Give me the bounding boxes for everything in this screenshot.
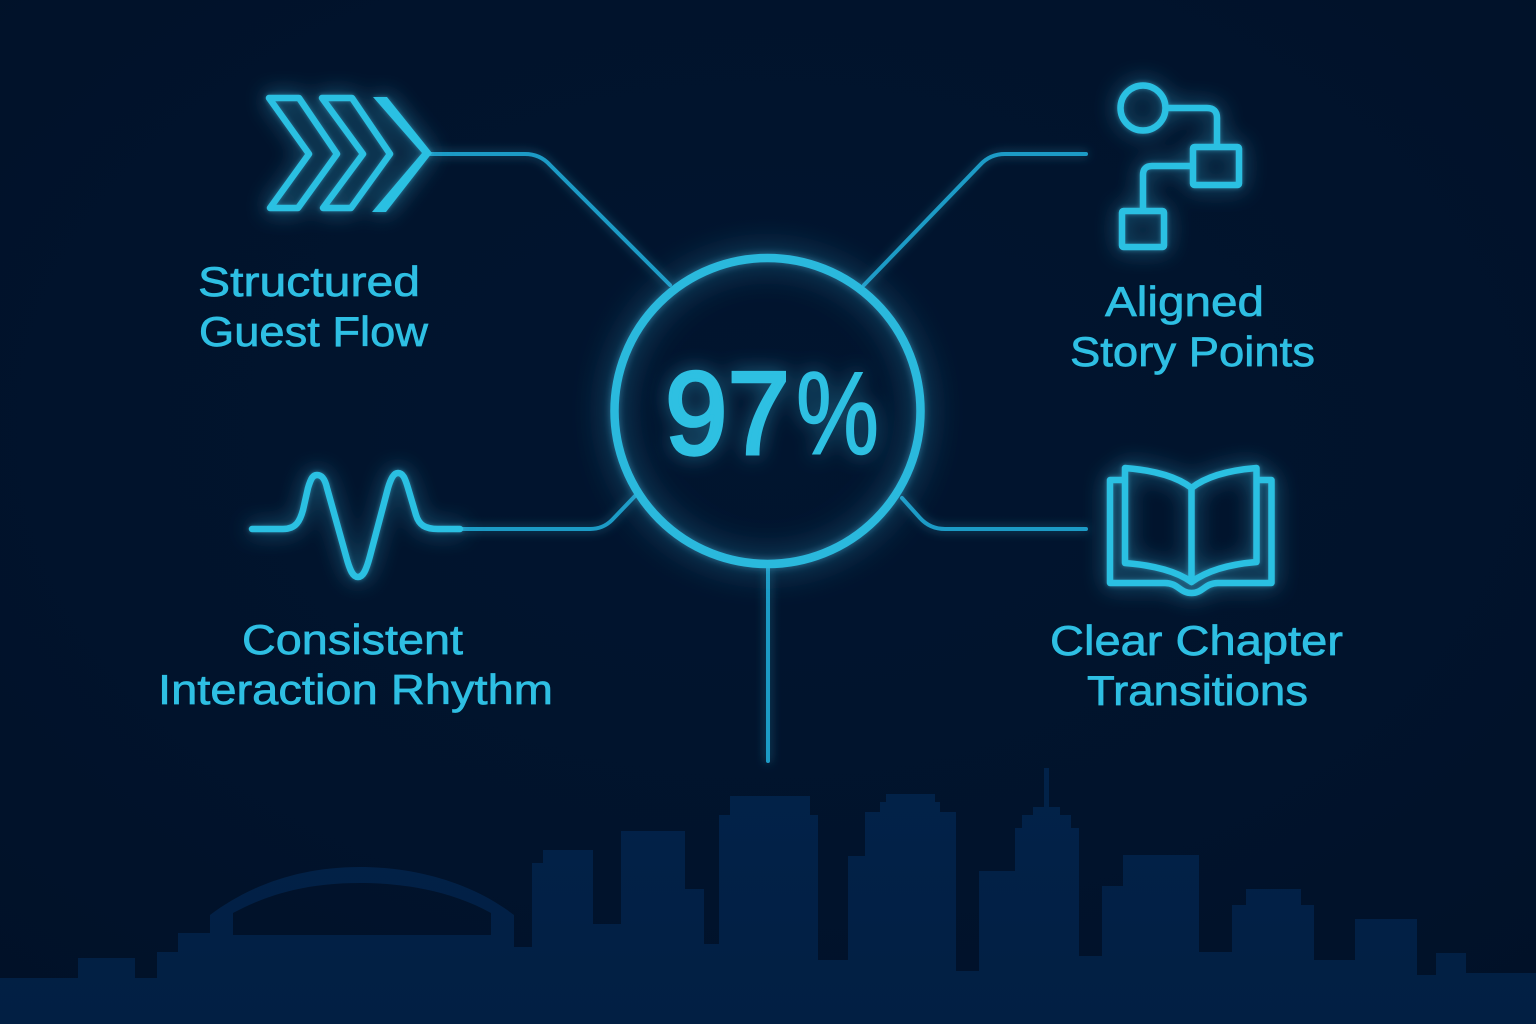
label: clear chapter transitions: Transitions bbox=[1087, 667, 1308, 714]
central metric: 97 bbox=[665, 348, 790, 480]
label: consistent interaction rhythm: Consistent bbox=[242, 616, 463, 663]
label: structured guest flow: Structured bbox=[198, 258, 420, 305]
icon: flow diagram bbox=[1120, 86, 1239, 247]
icon: rhythm wave bbox=[252, 473, 460, 577]
label: consistent interaction rhythm: Interaction Rhythm bbox=[158, 666, 553, 713]
central metric bbox=[665, 348, 879, 480]
label: aligned story points: Story Points bbox=[1070, 328, 1315, 375]
icon: open book bbox=[1110, 468, 1272, 593]
label: aligned story points bbox=[1070, 278, 1315, 375]
central metric: % bbox=[796, 348, 879, 480]
connector: bottom bbox=[766, 567, 770, 761]
connector: top-left bbox=[430, 154, 670, 285]
central ring bbox=[614, 258, 920, 564]
label: structured guest flow bbox=[198, 258, 429, 355]
label: consistent interaction rhythm bbox=[158, 616, 553, 713]
label: structured guest flow: Guest Flow bbox=[199, 308, 429, 355]
city skyline silhouette bbox=[0, 768, 1536, 1024]
label: clear chapter transitions bbox=[1050, 617, 1343, 714]
connector: left bbox=[460, 496, 635, 529]
label: clear chapter transitions: Clear Chapter bbox=[1050, 617, 1343, 664]
connector: right bbox=[902, 498, 1086, 529]
icon: chevrons bbox=[269, 97, 432, 212]
label: aligned story points: Aligned bbox=[1105, 278, 1264, 325]
connector: top-right bbox=[864, 154, 1086, 285]
